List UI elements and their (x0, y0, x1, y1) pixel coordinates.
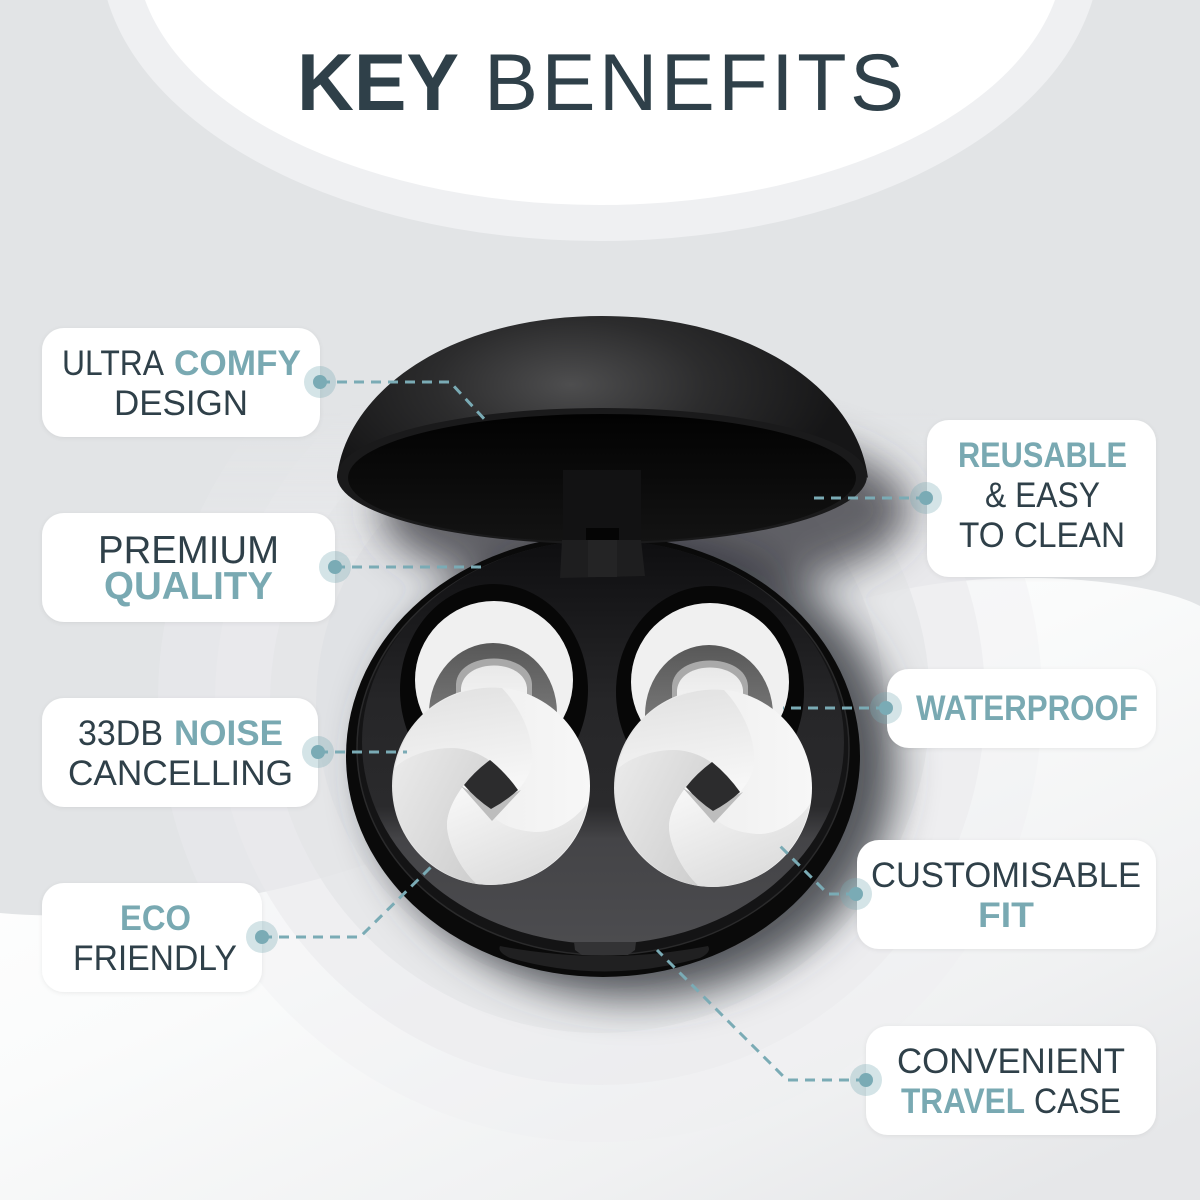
case base (346, 535, 860, 977)
callout: 33db noise cancelling: CANCELLING (68, 754, 293, 793)
callout: ultra comfy design: DESIGN (114, 384, 248, 423)
callout: waterproof: WATERPROOF (916, 689, 1138, 728)
callout: reusable and easy to clean: REUSABLE (958, 436, 1127, 475)
callout: reusable and easy to clean (910, 420, 1156, 577)
callout: waterproof (870, 669, 1156, 748)
callout: reusable and easy to clean: & EASY (985, 476, 1100, 515)
product shadow (368, 422, 910, 999)
callout: eco friendly (42, 883, 278, 992)
earplug: back left (415, 601, 573, 783)
connector lines (262, 382, 926, 1080)
callout: convenient travel case (850, 1026, 1156, 1135)
title: KEY (297, 38, 459, 128)
callout: customisable fit: CUSTOMISABLE (871, 856, 1141, 895)
callout: eco friendly: FRIENDLY (73, 939, 237, 978)
callout: premium quality (42, 513, 351, 622)
callout: premium quality: PREMIUM (98, 529, 279, 572)
callout: convenient travel case: CASE (1034, 1082, 1121, 1121)
earplug: front left (392, 687, 590, 885)
lid (337, 316, 868, 544)
callout: reusable and easy to clean: TO CLEAN (959, 516, 1125, 555)
callout: 33db noise cancelling: 33DB (78, 714, 163, 753)
callout: eco friendly: ECO (120, 899, 191, 938)
callout: premium quality: QUALITY (104, 565, 273, 608)
background (0, 578, 1200, 1200)
callout: ultra comfy design (42, 328, 336, 437)
callout: convenient travel case: TRAVEL (901, 1082, 1025, 1121)
hinge (560, 470, 645, 578)
callout: customisable fit (840, 840, 1156, 949)
callout: ultra comfy design: COMFY (174, 344, 301, 383)
title banner (100, 0, 1100, 241)
callout: 33db noise cancelling: NOISE (174, 714, 283, 753)
title (297, 38, 904, 128)
product: earplug case (337, 316, 868, 977)
callout: customisable fit: FIT (978, 896, 1034, 935)
earplug: front right (614, 689, 812, 887)
earplug: back right (631, 603, 789, 785)
callout: ultra comfy design: ULTRA (62, 344, 165, 383)
callout: 33db noise cancelling (42, 698, 334, 807)
callout: convenient travel case: CONVENIENT (897, 1042, 1125, 1081)
title: BENEFITS (484, 38, 904, 128)
